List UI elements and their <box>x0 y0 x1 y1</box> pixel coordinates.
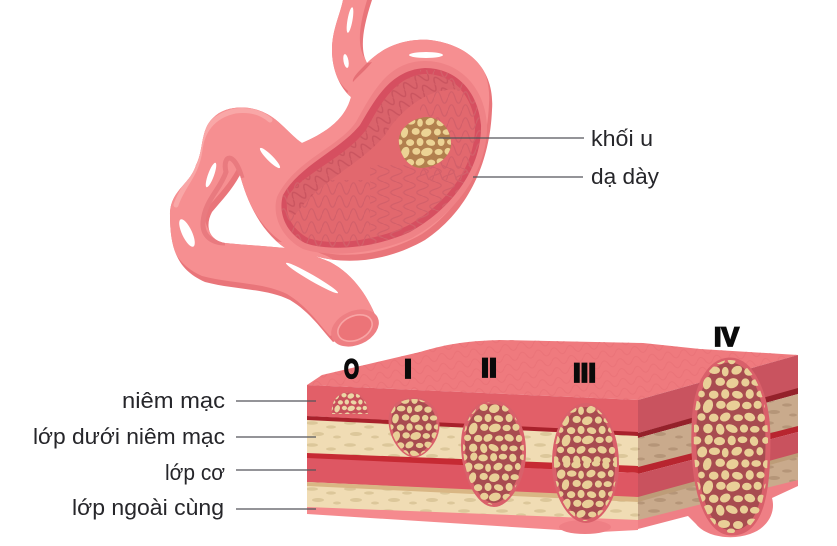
stage I: I <box>404 354 412 384</box>
stomach callouts <box>438 126 659 189</box>
tumour cells <box>332 392 368 414</box>
tumour base <box>399 117 451 168</box>
lowest tumour cells <box>710 518 755 533</box>
front face: second red line <box>307 453 638 473</box>
outer layer label: lớp ngoài cùng <box>72 495 224 520</box>
front face: red line <box>307 416 638 437</box>
tumour shape <box>694 360 768 533</box>
tumour cells <box>463 402 524 505</box>
tumour leader line <box>438 137 584 139</box>
right face: tan layer <box>638 453 798 503</box>
stomach highlights <box>176 7 443 296</box>
front face: serosa <box>307 507 638 532</box>
stomach body main colour <box>167 0 489 336</box>
upper rim highlight <box>176 110 270 205</box>
gastric folds <box>280 70 485 250</box>
right face: outer layer <box>638 457 798 521</box>
stage O tumour <box>332 392 368 414</box>
right face: red line <box>638 388 798 438</box>
right face: serosa <box>638 480 798 537</box>
right face: mucosa <box>638 355 798 433</box>
stomach body and duodenum shaded base <box>170 0 492 342</box>
tumour shape <box>390 399 438 456</box>
right face: second red line <box>638 426 798 474</box>
tumour shape <box>463 402 524 505</box>
tumour shape <box>554 405 617 521</box>
right face: submucosa <box>638 394 798 468</box>
stomach lining rim <box>276 61 487 254</box>
tumour cells <box>554 406 617 521</box>
submucosa label: lớp dưới niêm mạc <box>33 424 225 449</box>
muscle line <box>236 469 316 471</box>
mucosa line <box>236 400 316 402</box>
stage IV tumour <box>692 353 770 534</box>
stage I tumour <box>388 398 440 458</box>
esophagus fold <box>353 62 372 82</box>
front face: outer layer <box>307 486 638 521</box>
stage labels <box>344 322 739 388</box>
tumour cells <box>692 353 770 516</box>
outer ring <box>325 302 385 354</box>
front face: submucosa <box>307 420 638 468</box>
surface folds <box>307 340 798 400</box>
submucosa line <box>236 436 316 438</box>
tumour cells <box>398 118 452 166</box>
right face: muscle <box>638 432 798 498</box>
front face: muscle <box>307 458 638 498</box>
mucosa label: niêm mạc <box>122 388 225 413</box>
front face: mucosa <box>307 385 638 433</box>
muscle label: lớp cơ <box>165 460 225 485</box>
tumour shape <box>332 392 368 414</box>
stage O: O <box>344 354 359 384</box>
top surface <box>307 340 798 400</box>
tumour label: khối u <box>591 126 653 151</box>
pyloric fold shading <box>203 158 242 243</box>
stomach illustration <box>167 0 492 354</box>
pink bump below tumour <box>559 520 611 534</box>
stage III: III <box>573 358 596 388</box>
tissue cross-section block <box>307 340 798 537</box>
front face: tan layer <box>307 482 638 503</box>
stage IV: IV <box>714 322 739 352</box>
stomach leader line <box>473 176 583 178</box>
stage III tumour <box>553 395 619 534</box>
stomach cavity <box>281 68 481 248</box>
outer layer line <box>236 508 316 510</box>
stage II: II <box>481 353 497 383</box>
tumour cells <box>390 399 438 456</box>
tumour in stomach <box>398 117 452 168</box>
stomach label: dạ dày <box>591 164 659 189</box>
stage II tumour <box>461 400 526 507</box>
layer callouts <box>33 388 316 520</box>
duodenum opening <box>325 302 385 354</box>
inner lumen <box>334 310 376 346</box>
